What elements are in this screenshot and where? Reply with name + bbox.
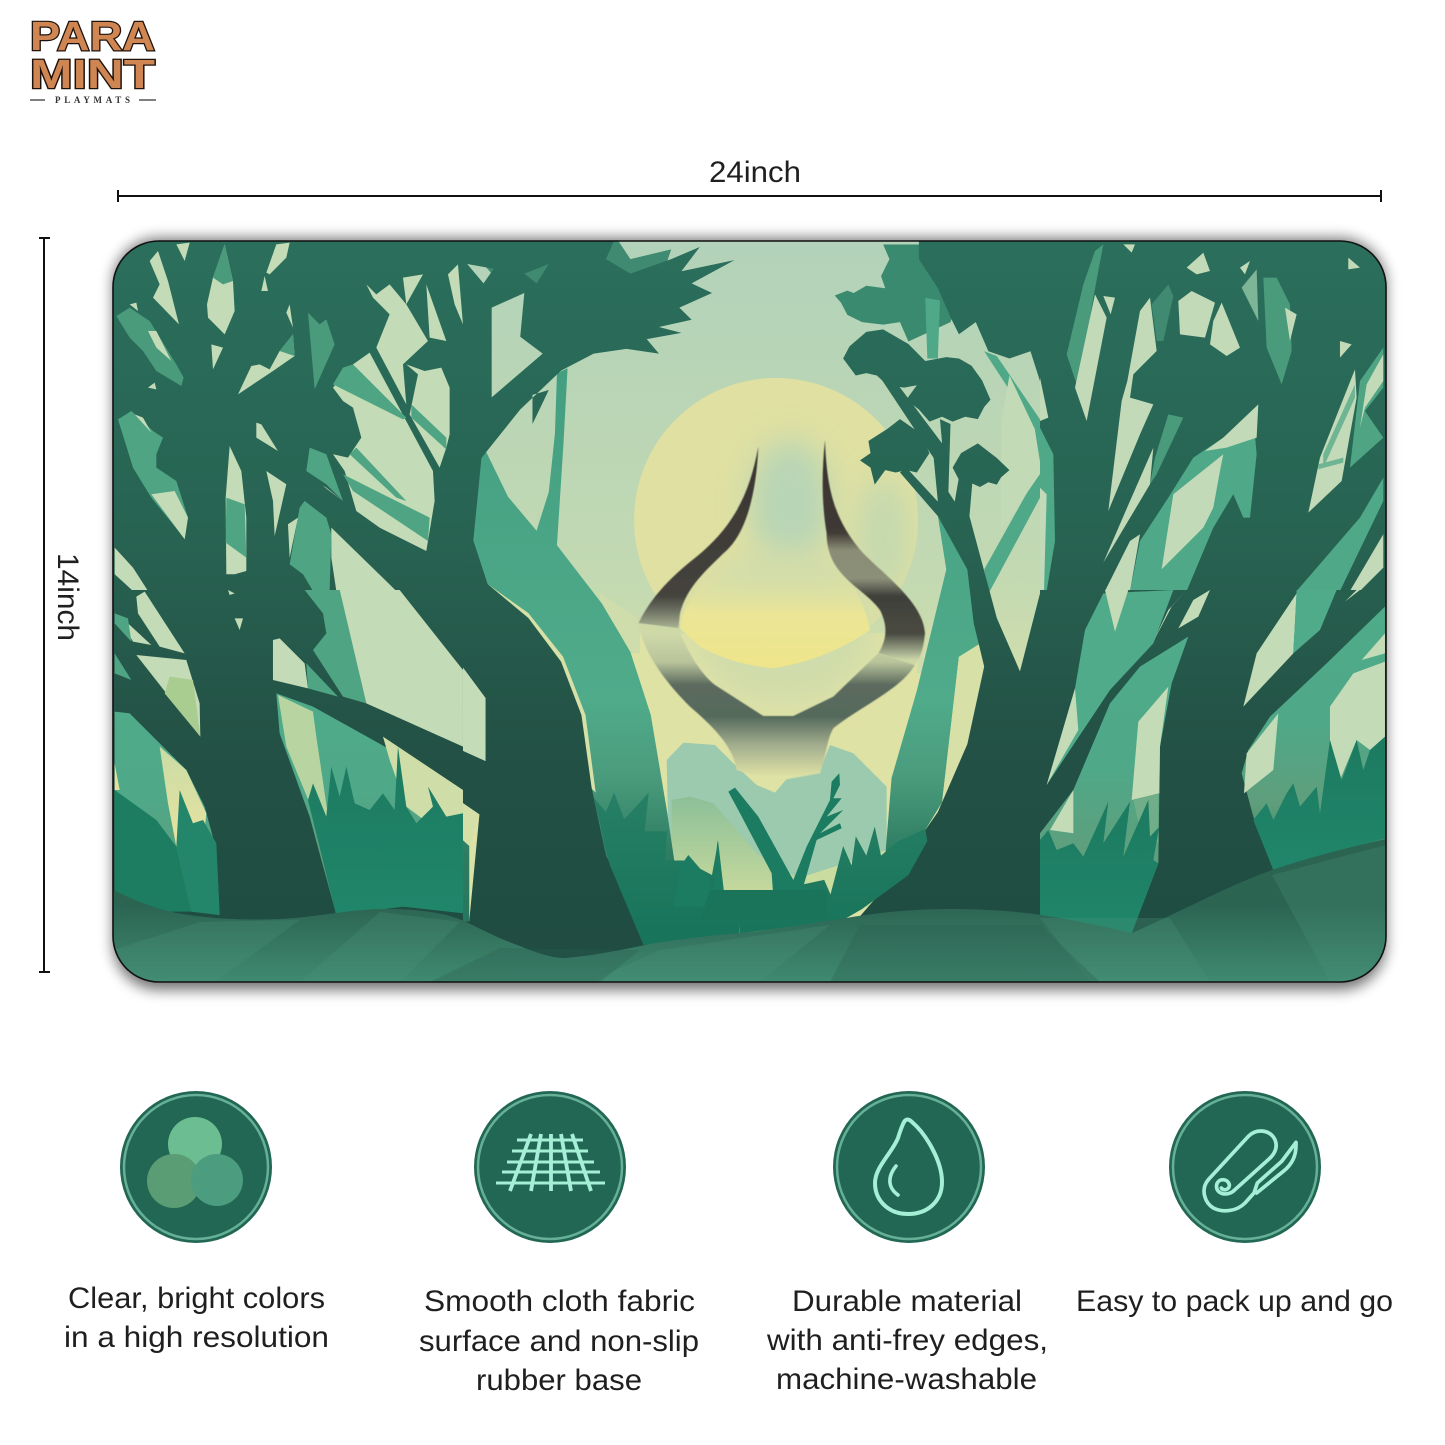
right tree base xyxy=(1040,590,1386,945)
caption: rubber base xyxy=(476,1364,642,1397)
mountains xyxy=(667,743,887,907)
thin background trunks xyxy=(925,298,1040,592)
central mana symbol and mountains xyxy=(600,440,940,907)
far and mid trees, right half xyxy=(835,245,1056,856)
medium trunk by small tree xyxy=(886,516,979,852)
caption: with anti-frey edges, xyxy=(766,1324,1048,1357)
foliage mid tone xyxy=(486,242,672,284)
horn: lower band xyxy=(638,623,915,782)
right bands xyxy=(1297,478,1383,591)
grass blades xyxy=(308,747,463,915)
playmat artwork xyxy=(113,241,1386,990)
feature: fabric xyxy=(419,1091,699,1397)
mid foliage near top xyxy=(834,244,952,342)
icon: water drop xyxy=(833,1091,985,1243)
logo wordmark: MINT: MINT xyxy=(30,51,155,97)
caption: Easy to pack up and go xyxy=(1076,1285,1393,1318)
caption: surface and non-slip xyxy=(419,1325,699,1358)
caption: Durable material xyxy=(792,1285,1022,1318)
right glade xyxy=(1242,607,1385,870)
ground hills xyxy=(113,839,1386,990)
icon: woven grid xyxy=(474,1091,626,1243)
grass, centre band right xyxy=(738,827,927,933)
width dimension: 24inch xyxy=(118,156,1381,202)
playmat shadow xyxy=(113,238,1386,990)
haze inside sun xyxy=(750,440,830,567)
grass: centre right xyxy=(594,793,740,953)
left tree base xyxy=(113,590,463,945)
right lower shards, glades and grass xyxy=(1040,590,1385,933)
left canopy shards xyxy=(115,243,463,591)
dark tree silhouettes, left half xyxy=(463,242,734,958)
feature: durable xyxy=(766,1091,1048,1396)
height dimension: 14inch xyxy=(39,238,84,972)
icon: rolled mat xyxy=(1169,1091,1321,1243)
medium trunk: centre xyxy=(473,368,674,862)
caption: Clear, bright colors xyxy=(68,1282,325,1315)
logo xyxy=(30,13,156,105)
feature: portable xyxy=(1076,1091,1393,1318)
caption: machine-washable xyxy=(776,1363,1037,1396)
right canopy tree base xyxy=(1040,241,1386,590)
width dimension: 24inch: 24inch xyxy=(709,156,801,189)
left canopy: slit xyxy=(226,446,246,574)
logo tagline: PLAYMATS xyxy=(55,95,130,105)
hill facets xyxy=(113,845,1386,982)
small tree: trunk and branches xyxy=(879,371,1020,671)
horn: left xyxy=(638,447,758,628)
hill xyxy=(113,839,1386,990)
medium trunk: left centre xyxy=(463,840,470,922)
left canopy: lower trunk xyxy=(290,501,331,591)
left lower shards, glades and grass xyxy=(115,590,463,915)
logo wordmark: PARA: PARA xyxy=(30,13,155,59)
centre branches glade xyxy=(1130,437,1257,590)
small tree: canopies xyxy=(843,329,990,422)
pale light trunk xyxy=(463,668,486,761)
height dimension: 14inch: 14inch xyxy=(51,553,84,641)
left canopy: big glade xyxy=(333,353,435,551)
far and mid trees, left half xyxy=(463,242,674,922)
upper glade xyxy=(273,638,308,688)
left glade xyxy=(115,712,220,915)
right canopy shards xyxy=(1040,244,1383,591)
pale sliver beside trunk xyxy=(488,584,596,793)
dark tree silhouettes, right half xyxy=(843,242,1040,916)
shard between branches xyxy=(1243,593,1297,707)
trunk edge xyxy=(1040,428,1055,591)
yellow lens xyxy=(680,587,870,668)
sky xyxy=(464,242,1040,933)
icon: three overlapping circles xyxy=(120,1091,272,1243)
grass: middle xyxy=(1040,800,1159,933)
feature: colors xyxy=(64,1091,329,1354)
left canopy: side hole xyxy=(118,411,188,539)
lower glow xyxy=(631,633,921,718)
playmat border xyxy=(113,241,1386,982)
grass, centre xyxy=(594,793,740,953)
lower glade xyxy=(276,693,463,915)
sapling xyxy=(673,773,843,920)
horn: right xyxy=(823,440,925,665)
caption: Smooth cloth fabric xyxy=(424,1285,695,1318)
grass: right xyxy=(1253,737,1385,870)
sun xyxy=(634,378,918,626)
caption: in a high resolution xyxy=(64,1321,329,1354)
left canopy tree base xyxy=(114,242,426,590)
